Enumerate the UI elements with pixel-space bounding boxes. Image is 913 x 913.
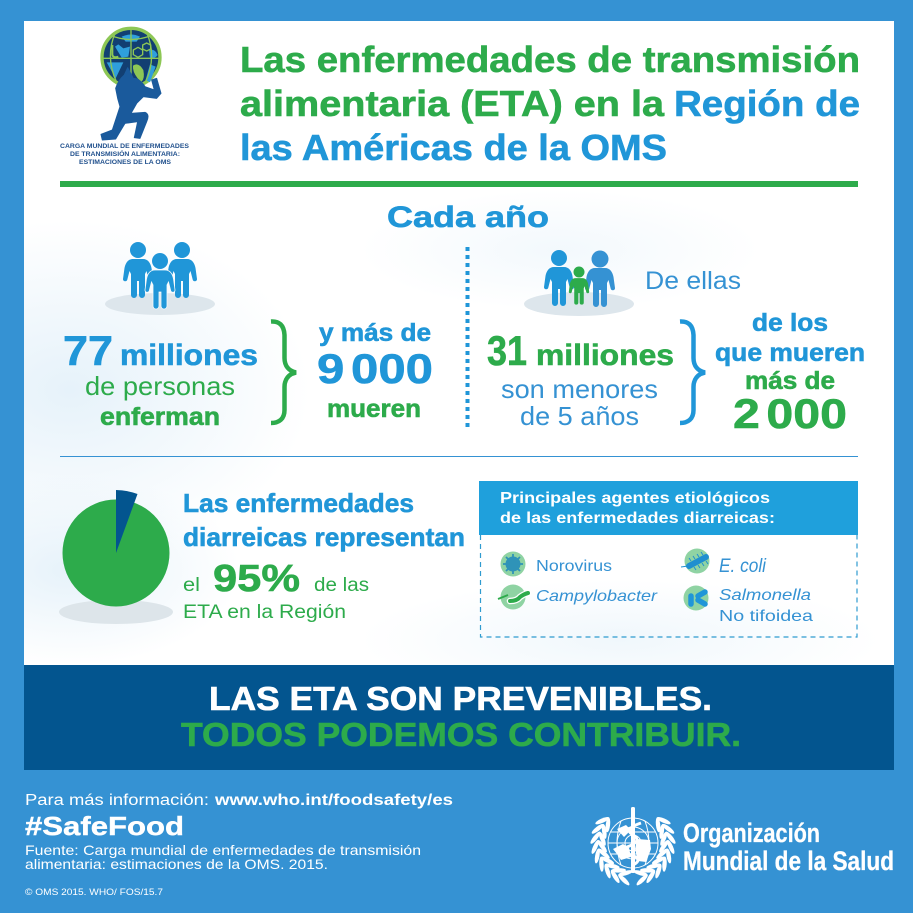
text: Norovirus: Norovirus (536, 558, 612, 575)
text: 31 milliones son menores de 5 años: son menores (501, 374, 658, 404)
panel: main white content (0, 21, 894, 700)
icon: E. coli (681, 548, 710, 574)
text: Organización Mundial de la Salud (683, 818, 894, 876)
text: y más de 9 000 mueren (317, 319, 433, 423)
title: las Américas de la OMS (240, 127, 667, 168)
text: logo caption: ESTIMACIONES DE LA OMS (79, 159, 172, 166)
chart: pie 95 percent (59, 490, 173, 624)
icon: WHO emblem (589, 807, 677, 887)
banner: prevention message (24, 665, 894, 770)
text: 31 milliones son menores de 5 años (487, 327, 674, 431)
text: diarrheal diseases 95 percent: Las enfermedades (183, 488, 414, 518)
logo: global burden of foodborne diseases (60, 28, 190, 166)
text: de los que mueren más de 2 000: 2 000 (733, 390, 847, 437)
text: y más de 9 000 mueren: mueren (327, 395, 421, 423)
divider: vertical dotted (466, 247, 470, 429)
text: de los que mueren más de 2 000: de los (752, 309, 828, 337)
text: 77 milliones de personas enferman (63, 327, 258, 431)
panel: principal etiological agents (479, 481, 858, 637)
text: diarrheal diseases 95 percent: de las (314, 575, 369, 596)
footer: more information and source: Para más información: (25, 792, 209, 809)
panel header: de las enfermedades diarreicas: (500, 510, 775, 527)
banner: prevention message: LAS ETA SON PREVENIBLES. (209, 680, 712, 717)
title (240, 39, 860, 168)
title: Las enfermedades de transmisión (240, 39, 860, 80)
text: de los que mueren más de 2 000: más de (745, 367, 835, 395)
panel header: Principales agentes etiológicos (500, 490, 770, 507)
text: Organización Mundial de la Salud: Organización (683, 818, 820, 848)
heading: Cada año: Cada año (387, 201, 549, 234)
text: 31 milliones son menores de 5 años: milliones (536, 339, 674, 372)
text: logo caption (60, 143, 190, 166)
text: y más de 9 000 mueren: y más de (319, 319, 431, 347)
footer: more information and source: Fuente: Carga mundial de enfermedades de transmisión (25, 842, 421, 858)
icon: green brace (271, 321, 296, 423)
text: diarrheal diseases 95 percent: ETA en la Región (183, 602, 346, 623)
footer: more information and source: alimentaria: estimaciones de la OMS. 2015. (25, 856, 328, 872)
text: y más de 9 000 mueren: 9 000 (317, 345, 433, 392)
icon: family with child (524, 250, 634, 316)
icon: Salmonella (684, 586, 708, 610)
text: diarrheal diseases 95 percent: 95% (213, 558, 300, 600)
footer: more information and source: © OMS 2015. WHO/ FOS/15.7 (25, 887, 163, 897)
icon: figure carrying globe (101, 28, 161, 140)
text: 77 milliones de personas enferman: enferman (100, 403, 220, 431)
text: Salmonella No tifoidea (719, 587, 813, 625)
text: De ellas: De ellas (645, 267, 741, 295)
icon: Campylobacter (498, 584, 528, 610)
text: Campylobacter: Campylobacter (536, 588, 658, 605)
text: diarrheal diseases 95 percent (183, 488, 465, 623)
text: 77 milliones de personas enferman: 77 (63, 327, 113, 374)
text: diarrheal diseases 95 percent: el (183, 575, 200, 596)
title: Región de (674, 83, 860, 124)
logo: World Health Organization (589, 807, 894, 887)
text: 77 milliones de personas enferman: de personas (85, 371, 235, 401)
footer: more information and source: #SafeFood (25, 811, 184, 841)
icon: norovirus (500, 552, 526, 576)
text: logo caption: DE TRANSMISIÓN ALIMENTARIA: (70, 149, 180, 158)
banner: prevention message: TODOS PODEMOS CONTRIBUIR. (181, 716, 741, 753)
text: Salmonella No tifoidea: Salmonella (719, 587, 811, 604)
icon: group of three people (105, 242, 215, 315)
title: alimentaria (ETA) en la (240, 83, 665, 124)
footer: more information and source (25, 792, 453, 897)
text: 31 milliones son menores de 5 años: de 5 años (520, 401, 639, 431)
footer: more information and source: www.who.int/foodsafety/es (214, 792, 453, 809)
text: de los que mueren más de 2 000: que mueren (715, 339, 865, 367)
icon: blue brace (680, 321, 705, 423)
text: E. coli: E. coli (719, 556, 767, 577)
text: 31 milliones son menores de 5 años: 31 (487, 327, 527, 374)
panel header (479, 481, 858, 535)
text: de los que mueren más de 2 000 (715, 309, 865, 437)
text: logo caption: CARGA MUNDIAL DE ENFERMEDADES (60, 143, 190, 150)
text: diarrheal diseases 95 percent: diarreicas representan (183, 522, 465, 552)
text: Salmonella No tifoidea: No tifoidea (719, 608, 813, 625)
text: 77 milliones de personas enferman: milliones (120, 339, 258, 372)
